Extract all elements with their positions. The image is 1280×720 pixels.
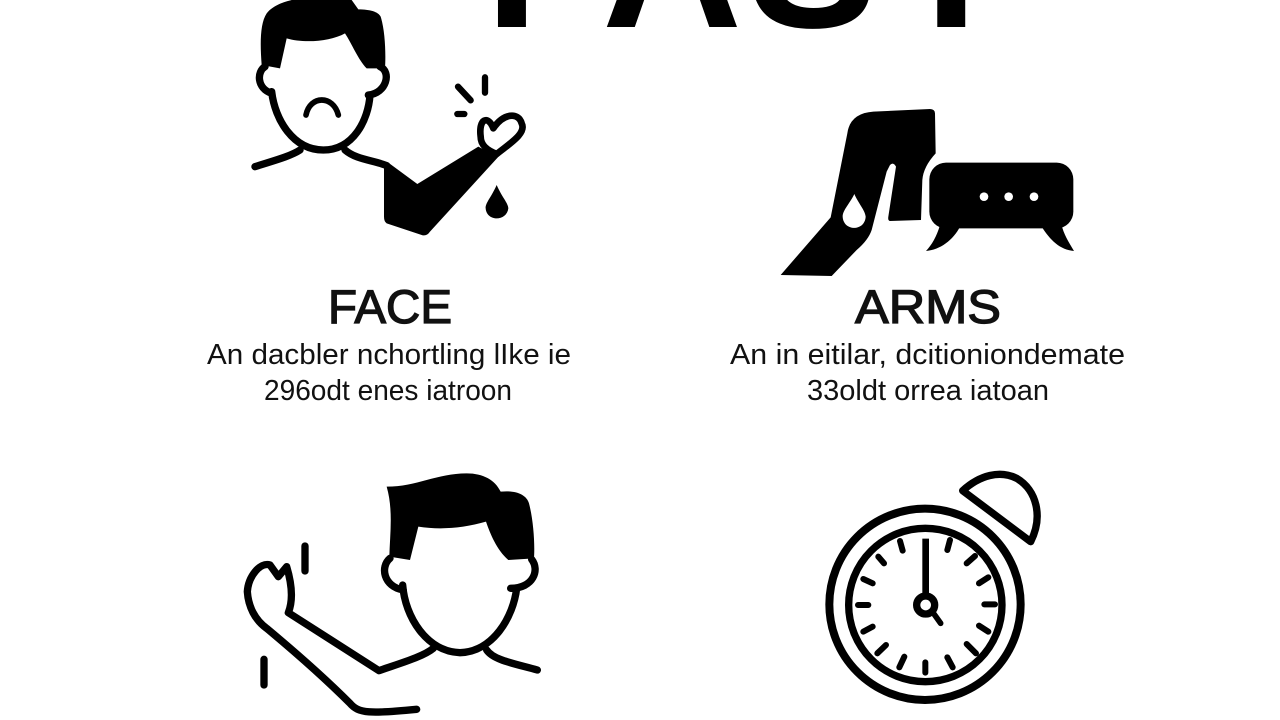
- text block: arms description: 33oldt orrea iatoan: [807, 375, 1049, 407]
- text block: face description: An dacbler nchortling lIke ie: [207, 339, 571, 371]
- panel: face: [207, 0, 571, 407]
- icon: stopwatch: [829, 474, 1037, 700]
- heading: arms: ARMS: [855, 280, 1001, 333]
- text block: face description: 296odt enes iatroon: [264, 375, 512, 407]
- panel: arms: [730, 109, 1125, 407]
- text block: arms description: An in eitilar, dcitioniondemate: [730, 339, 1125, 371]
- icon: man raising arm: [247, 473, 537, 712]
- icon: arm and speech bubble: [781, 109, 1074, 276]
- text block: face description: [207, 339, 571, 407]
- text block: arms description: [730, 339, 1125, 407]
- icon: drooping face and weak arm: [255, 0, 523, 235]
- heading: face: FACE: [328, 280, 452, 333]
